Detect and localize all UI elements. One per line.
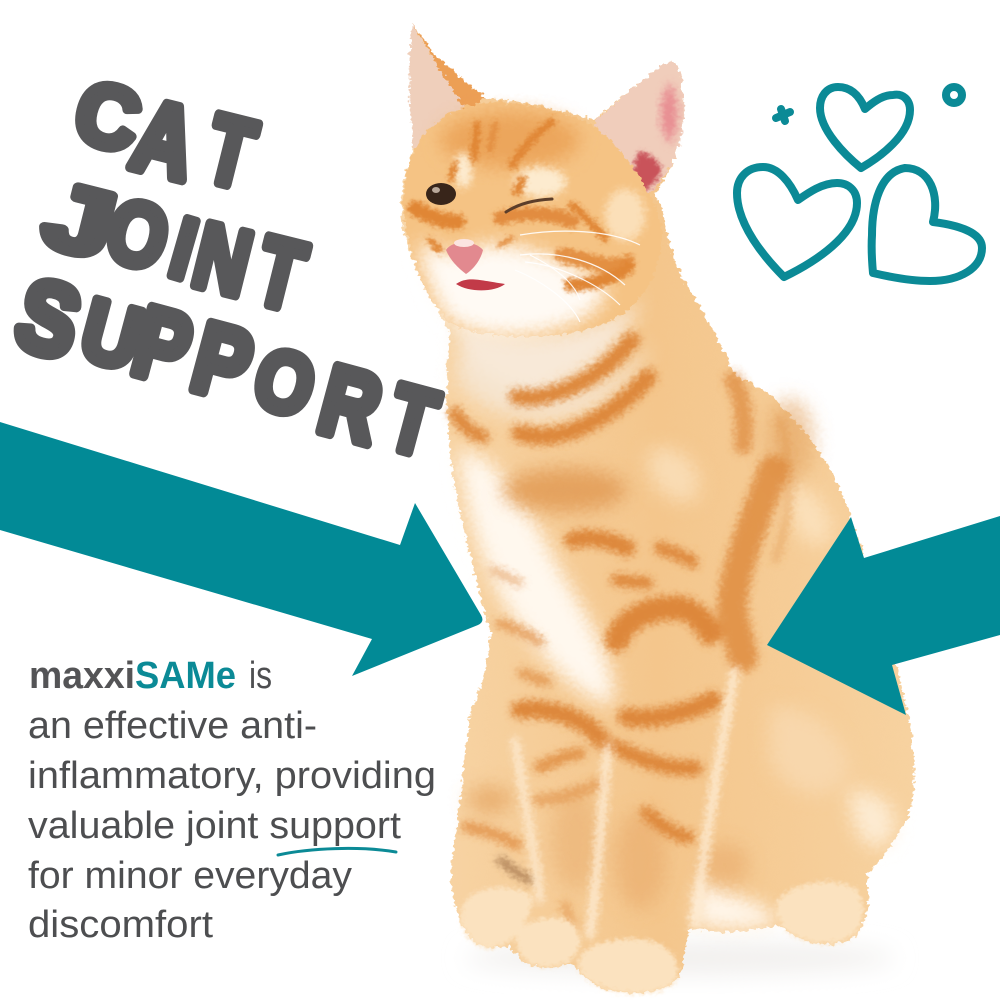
nose (446, 242, 483, 274)
body stripes (455, 340, 789, 925)
leg highlights (515, 670, 735, 935)
head (403, 102, 662, 337)
title: C (66, 62, 150, 172)
title: T (246, 217, 315, 332)
text block: description (28, 655, 436, 946)
icon: right heart (872, 168, 982, 281)
underline: support (278, 848, 396, 855)
arrow: right teal arrow pointing left (767, 516, 1000, 715)
head stripes (415, 122, 628, 285)
forehead orange wash (440, 112, 580, 168)
title: T (378, 365, 447, 476)
title: A (122, 78, 207, 202)
text block: description: discomfort (28, 904, 213, 946)
title: P (122, 285, 202, 407)
title: S (5, 257, 91, 382)
text block: description: is (249, 655, 272, 697)
right ear (595, 60, 684, 197)
shadow under cat (465, 942, 895, 974)
icon: left heart (737, 167, 857, 277)
title: N (184, 202, 261, 316)
cat silhouette (401, 23, 914, 993)
arrow: left teal arrow pointing right (0, 422, 482, 676)
title: I (161, 199, 207, 297)
mouth (456, 279, 505, 290)
diffuse orange patches (468, 398, 814, 910)
whiskers (515, 231, 640, 322)
title: U (71, 279, 152, 389)
text block: description: maxxi (29, 655, 135, 697)
wink (506, 199, 552, 212)
text block: description: inflammatory, providing (28, 755, 436, 797)
title: O (244, 328, 325, 436)
text block: description: an effective anti- (28, 705, 317, 747)
title (5, 62, 447, 476)
cat face details (426, 183, 640, 322)
text block: description: valuable joint support (28, 805, 401, 847)
title: T (196, 95, 265, 210)
icon: hearts and sparkles (737, 87, 982, 281)
title: J (35, 162, 125, 279)
pale brow patches (454, 152, 645, 241)
title: P (182, 301, 263, 423)
title: R (309, 344, 393, 465)
paws (461, 882, 863, 994)
white muzzle and chin (420, 240, 605, 336)
title: O (97, 179, 178, 290)
text block: description: SAMe (135, 655, 236, 697)
photo: winking ginger cat (401, 23, 914, 994)
icon: small ring (946, 87, 962, 103)
icon: small plus (776, 109, 790, 121)
text block: description: for minor everyday (28, 855, 352, 897)
neck and chest pale fur (455, 300, 894, 930)
left ear (409, 23, 485, 155)
icon: top heart (820, 87, 910, 168)
eye (426, 183, 456, 205)
